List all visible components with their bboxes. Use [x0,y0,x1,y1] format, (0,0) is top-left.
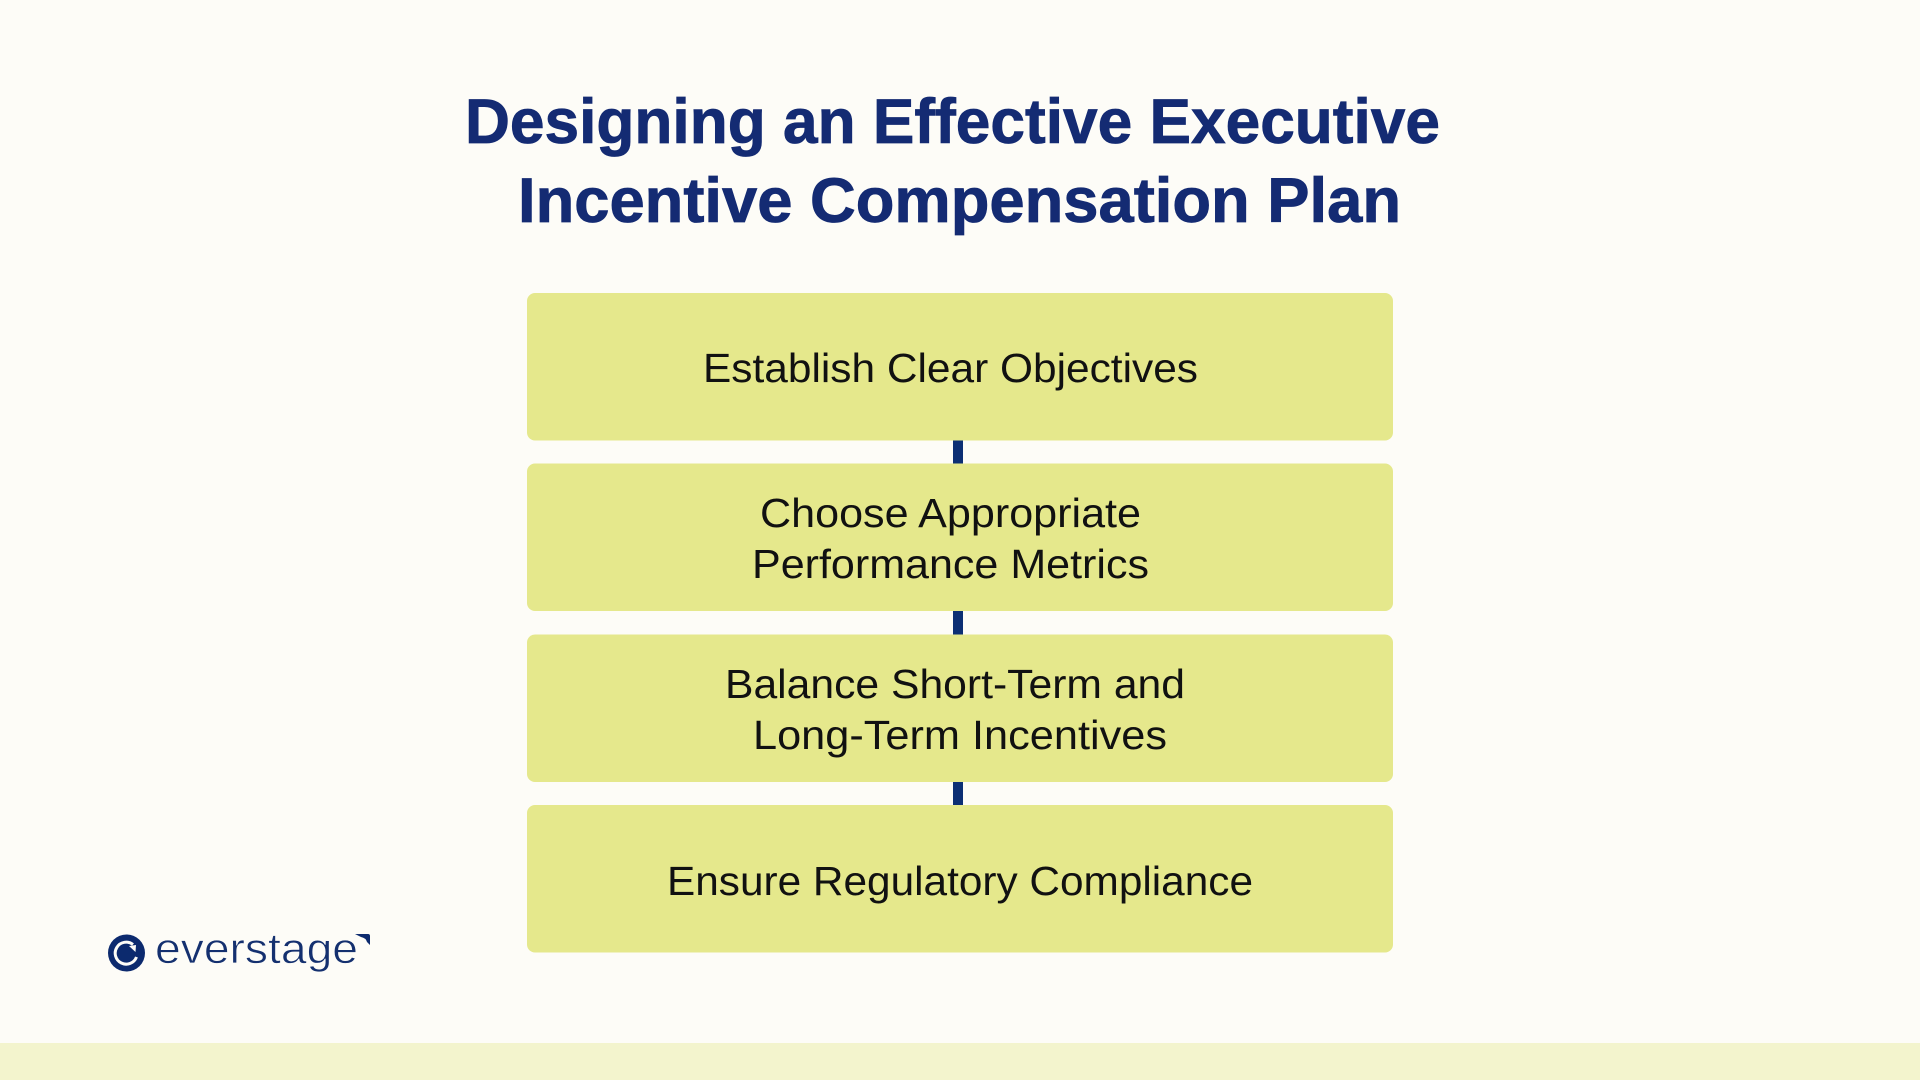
icon: corner tick [355,934,370,945]
title [465,87,1440,236]
connector: step 1 to step 2 [953,440,963,464]
connector: step 2 to step 3 [953,611,963,635]
wordmark: everstage [155,925,358,973]
step 3: Balance Short-Term and Long-Term Incentives: Balance Short-Term and [725,661,1185,707]
step 2: Choose Appropriate Performance Metrics: Choose Appropriate [760,490,1141,536]
footer band [0,1043,1920,1080]
step 1: Establish Clear Objectives: Establish Clear Objectives [703,345,1198,391]
step 3: Balance Short-Term and Long-Term Incentives [527,634,1393,782]
title: Designing an Effective Executive [465,87,1440,157]
connector: step 3 to step 4 [953,782,963,806]
step 3: Balance Short-Term and Long-Term Incentives: Long-Term Incentives [753,712,1167,758]
step 2: Choose Appropriate Performance Metrics: Performance Metrics [752,541,1149,587]
logo: everstage [108,925,370,973]
step 4: Ensure Regulatory Compliance: Ensure Regulatory Compliance [667,858,1253,904]
title: Incentive Compensation Plan [518,166,1401,236]
step 1: Establish Clear Objectives [527,293,1393,440]
step 4: Ensure Regulatory Compliance [527,805,1393,952]
icon: everstage mark [108,934,145,972]
step 2: Choose Appropriate Performance Metrics [527,464,1393,611]
